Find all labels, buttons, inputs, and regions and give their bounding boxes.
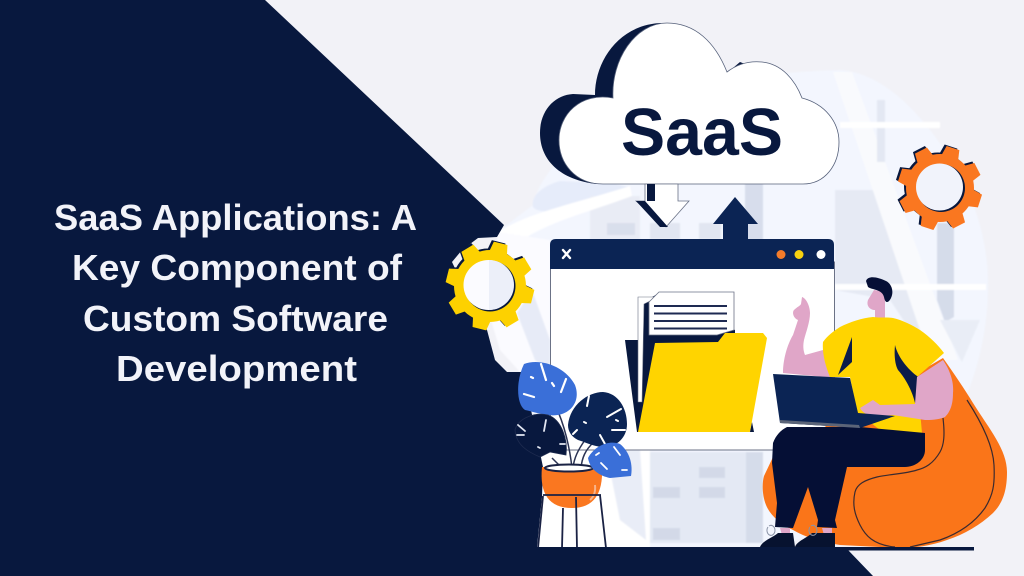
close icon bbox=[563, 250, 570, 258]
cloud shadow bbox=[540, 23, 760, 184]
gear: orange bbox=[885, 134, 993, 241]
shoes bbox=[760, 533, 835, 547]
folder front bbox=[638, 333, 767, 432]
pot bbox=[542, 467, 602, 508]
title: Custom Software bbox=[83, 298, 388, 339]
beanbag bbox=[763, 358, 1007, 548]
left arm bbox=[783, 297, 835, 378]
background blob with pale buildings bbox=[488, 70, 988, 548]
window header bbox=[550, 239, 834, 269]
floor line bbox=[502, 547, 974, 550]
cloud body bbox=[559, 23, 839, 184]
leaf: navy right bbox=[568, 392, 627, 447]
arrow: upload bbox=[713, 197, 758, 242]
gear: yellow bbox=[435, 231, 543, 339]
window dots bbox=[776, 250, 826, 259]
person on beanbag bbox=[760, 277, 1007, 548]
browser window bbox=[550, 197, 834, 450]
window body bbox=[550, 262, 834, 450]
trousers bbox=[772, 427, 925, 528]
arrow: download bbox=[636, 184, 689, 227]
plant stand bbox=[538, 495, 606, 548]
shirt shadow right bbox=[895, 345, 923, 403]
title: Development bbox=[116, 348, 357, 389]
shirt bbox=[823, 317, 944, 433]
head bbox=[867, 290, 885, 320]
beanbag seams bbox=[854, 400, 994, 547]
stems bbox=[552, 405, 594, 468]
plant bbox=[515, 362, 632, 548]
title: Key Component of bbox=[72, 247, 403, 288]
leaf: blue bbox=[518, 362, 577, 415]
document lines bbox=[654, 306, 727, 328]
document page bbox=[649, 292, 734, 335]
shirt shadow left bbox=[838, 337, 852, 375]
icon: folder with documents bbox=[625, 292, 767, 432]
leaf: navy left bbox=[515, 414, 566, 457]
title bbox=[54, 197, 417, 389]
right arm bbox=[860, 360, 953, 420]
cloud with SaaS label bbox=[540, 23, 839, 184]
leaf: blue small bbox=[588, 443, 632, 478]
title: SaaS Applications: A bbox=[54, 197, 417, 238]
feet bbox=[780, 528, 832, 535]
laces bbox=[767, 525, 817, 535]
cloud label: SaaS bbox=[621, 95, 783, 170]
hair bbox=[866, 277, 892, 302]
laptop bbox=[773, 374, 895, 428]
